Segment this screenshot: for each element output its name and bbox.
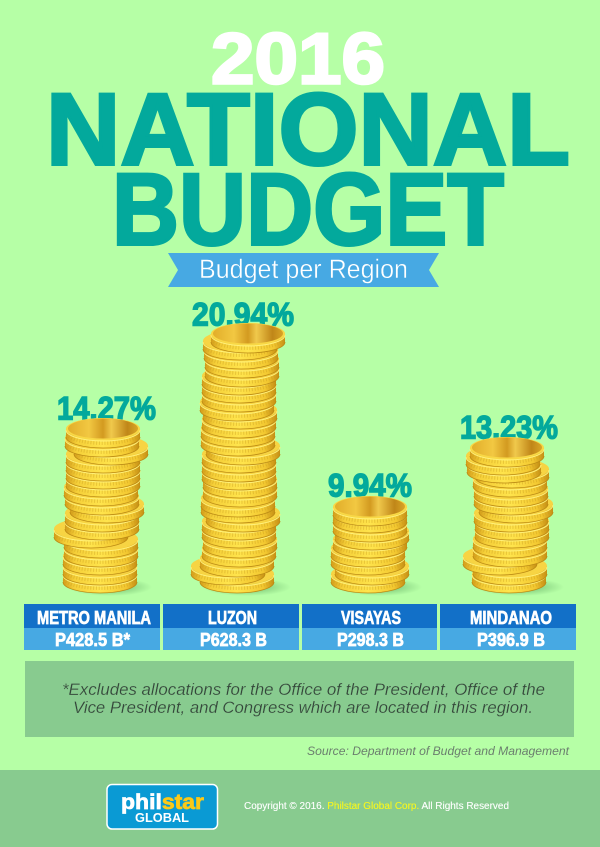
title year 2016: 2016 [211,20,385,100]
column: Visayas: P298.3 B [337,630,404,650]
coin stack: Mindanao [463,437,564,596]
percent: Mindanao: 13.23% [460,410,558,446]
column: Luzon [163,604,299,650]
column: Visayas [302,604,437,650]
coin stack: Luzon [191,323,291,596]
philstar logo: philstar [121,790,205,814]
title [46,20,570,266]
percent: Metro Manila: 14.27% [57,390,156,426]
region table [24,604,576,650]
coin stack: Visayas [331,496,422,596]
column: Luzon: LUZON [208,608,257,628]
footnote panel: Vice President, and Congress which are located in this region. [73,698,533,717]
column: Metro Manila: P428.5 B* [55,630,130,650]
column: Metro Manila [24,604,160,650]
column: Luzon: P628.3 B [200,630,267,650]
footnote panel [25,661,574,737]
footnote panel: *Excludes allocations for the Office of the President, Office of the [62,680,545,699]
copyright: Copyright © 2016. Philstar Global Corp. All Rights Reserved [244,801,509,812]
percentage labels [57,296,558,504]
column: Mindanao [440,604,576,650]
column: Visayas: VISAYAS [341,608,401,628]
footer band [0,770,600,847]
title line National: NATIONAL [46,72,570,186]
percent: Visayas: 9.94% [328,468,412,504]
column: Mindanao: P396.9 B [477,630,545,650]
source line: Source: Department of Budget and Management [307,744,570,758]
column: Metro Manila: METRO MANILA [37,608,151,628]
percent: Luzon: 20.94% [192,296,294,332]
coin stack: Metro Manila [54,418,152,596]
column: Mindanao: MINDANAO [470,608,552,628]
philstar logo [107,784,218,829]
philstar logo: GLOBAL [135,811,189,825]
ribbon: budget per region: Budget per Region [199,254,408,284]
title line Budget: BUDGET [112,152,504,266]
